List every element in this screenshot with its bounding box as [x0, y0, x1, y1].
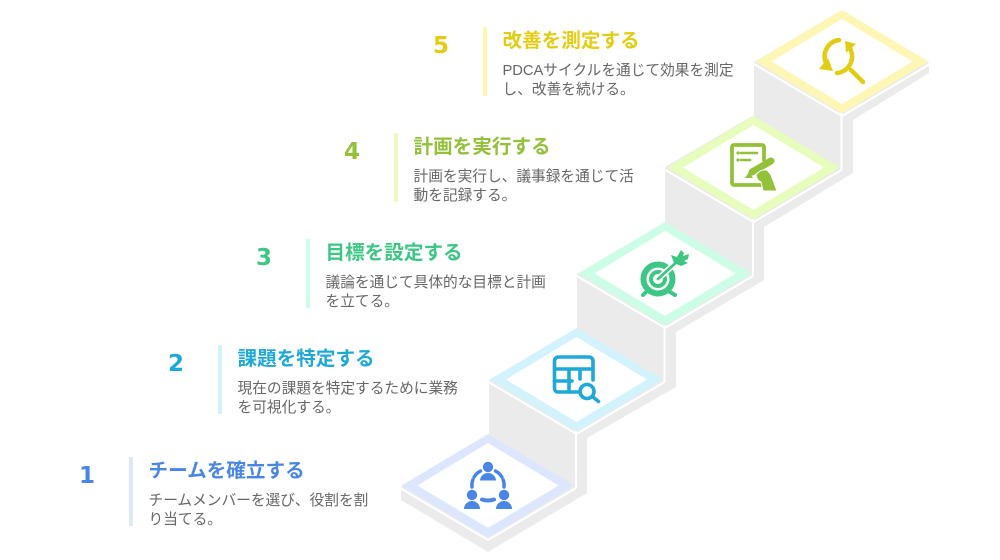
number 5: 5 — [433, 33, 449, 59]
heading: 目標を設定する — [326, 242, 463, 264]
description: 現在の課題を特定するために業務を可視化する。 — [238, 381, 458, 416]
step 5 text — [433, 27, 734, 98]
description: 議論を通じて具体的な目標と計画を立てる。 — [326, 275, 546, 310]
icon: team — [464, 462, 512, 509]
step 3 text — [256, 239, 546, 310]
step 1 text — [79, 457, 368, 528]
description: チームメンバーを選び、役割を割り当てる。 — [148, 493, 368, 528]
icon: document with writing hand — [732, 145, 777, 191]
accent bar — [306, 239, 310, 308]
staircase body — [401, 10, 929, 552]
heading: 課題を特定する — [238, 348, 375, 370]
step 3 platform — [577, 219, 753, 328]
heading: チームを確立する — [148, 460, 305, 482]
accent bar — [129, 457, 133, 526]
icon: refresh with magnifier — [819, 40, 863, 82]
step 2 platform — [488, 325, 664, 434]
description: PDCAサイクルを通じて効果を測定し、改善を続ける。 — [502, 63, 734, 98]
number 4: 4 — [344, 139, 360, 165]
number 2: 2 — [168, 351, 184, 377]
step 1 platform — [400, 431, 576, 540]
heading: 計画を実行する — [414, 136, 551, 158]
step 5 platform — [754, 10, 930, 116]
icon: table search — [554, 357, 598, 402]
description: 計画を実行し、議事録を通じて活動を記録する。 — [414, 169, 634, 204]
number 3: 3 — [256, 245, 272, 271]
accent bar — [483, 27, 487, 96]
accent bar — [394, 133, 398, 202]
number 1: 1 — [79, 463, 95, 489]
icon: target with dart — [643, 250, 689, 295]
step 4 text — [344, 133, 634, 204]
step 4 platform — [666, 113, 842, 222]
heading: 改善を測定する — [502, 30, 640, 52]
step 2 text — [168, 345, 458, 416]
accent bar — [218, 345, 222, 414]
